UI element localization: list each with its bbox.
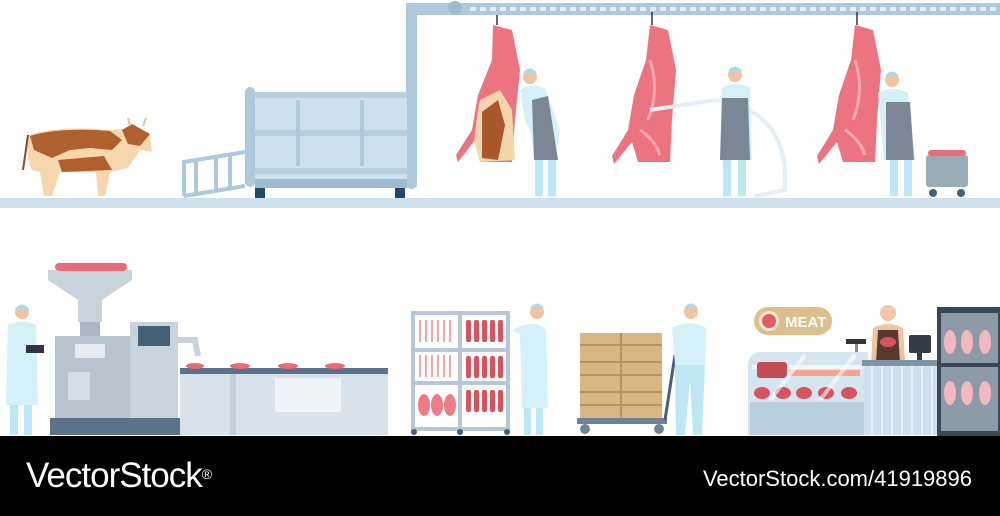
MEAT sign: MEAT [785, 314, 826, 331]
top floor [0, 198, 1000, 208]
carcass 2 [612, 12, 676, 164]
image id text: VectorStock.com/41919896 [703, 466, 972, 491]
worker at rack [512, 304, 548, 435]
pallet boxes and jack [577, 333, 675, 434]
hose spray [650, 100, 785, 196]
MEAT sign [754, 307, 832, 335]
conveyor [180, 363, 388, 435]
worker with tablet [6, 304, 44, 435]
seller [871, 305, 905, 362]
fridge [937, 307, 1000, 436]
grinder machine [48, 263, 232, 435]
counter [862, 360, 940, 435]
footer bar [0, 436, 1000, 516]
worker with pallet jack [672, 304, 706, 435]
overhead rail [406, 1, 1000, 189]
worker 1 [520, 68, 560, 196]
worker 2 [720, 66, 752, 196]
sausage rack [411, 313, 510, 435]
icon: cow [23, 118, 152, 196]
worker 3 [878, 72, 915, 196]
carcass 3 [817, 12, 881, 164]
scale and register [846, 335, 931, 361]
brand text: VectorStock® [26, 456, 213, 495]
cage and ramp [184, 87, 407, 198]
meat cart [926, 150, 968, 197]
carcass 1 with hide [456, 15, 520, 162]
display case [748, 352, 868, 435]
